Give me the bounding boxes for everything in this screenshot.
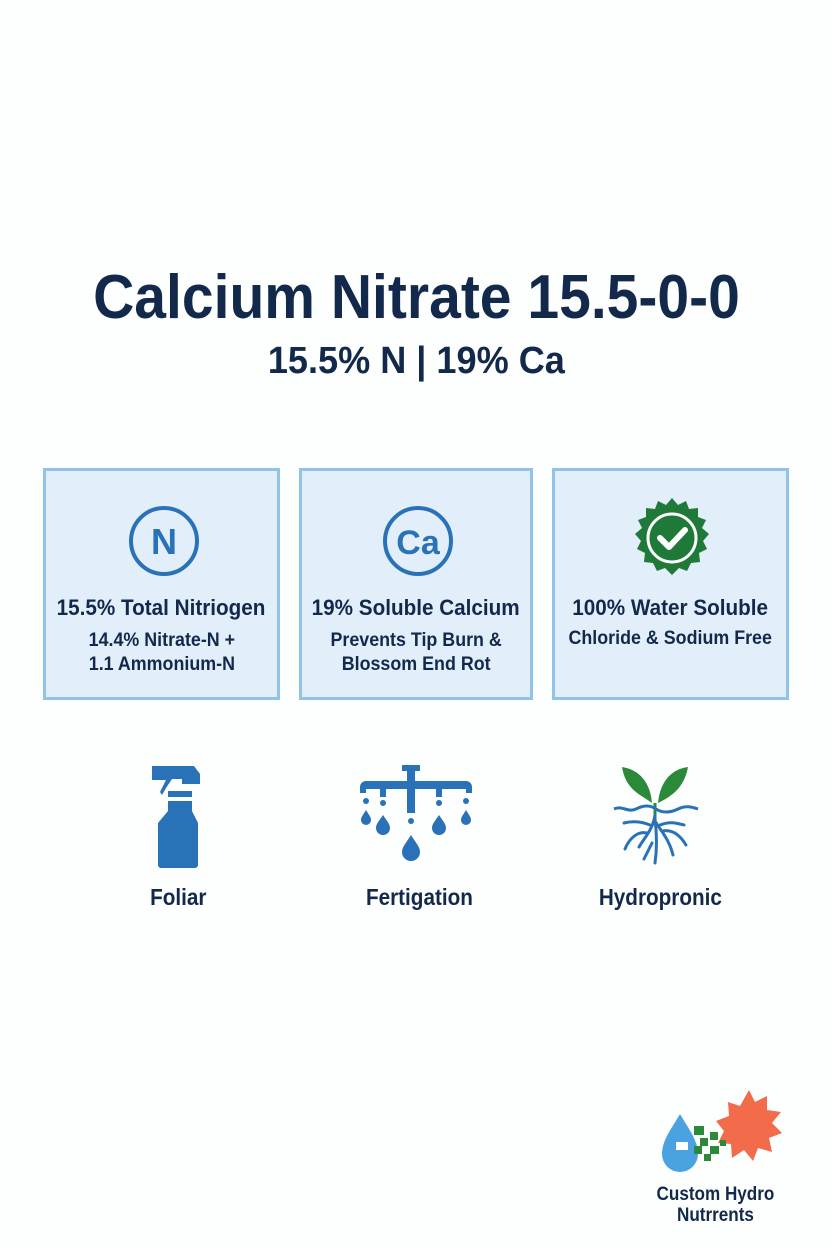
text: brand name: Nutrrents [677,1205,753,1226]
label: Hydroponic: Hydropronic [598,884,722,910]
icon: N circle: N [151,521,177,562]
title: Calcium Nitrate 15.5-0-0 [93,263,739,332]
icon: fertigation sprinkler [360,765,472,861]
icon: green check badge [635,498,709,575]
text: brand name: Custom Hydro [656,1184,774,1205]
text: Prevents Tip Burn & [330,630,502,651]
icon: N circle [129,506,199,576]
panel: nitrogen [43,468,280,700]
text [330,630,502,675]
label: Foliar: Foliar [150,884,206,910]
icon: Ca circle: Ca [396,524,441,562]
text [88,630,235,675]
text: Chloride & Sodium Free [569,628,772,649]
heading: 100% Water Soluble [573,595,768,620]
text: 1.1 Ammonium-N [88,654,235,675]
text: Blossom End Rot [342,654,490,675]
panel: water soluble [552,468,789,700]
heading: 15.5% Total Nitriogen [57,595,266,620]
text: 14.4% Nitrate-N + [88,630,235,651]
icon: spray bottle [152,766,200,868]
icon: hydroponic plant [613,767,698,864]
panel: calcium [299,468,533,700]
text: brand name [656,1184,774,1226]
logo [656,1090,782,1226]
icon: logo mark [662,1090,782,1172]
heading: 19% Soluble Calcium [312,595,520,620]
label: Fertigation: Fertigation [366,884,472,910]
subtitle: 15.5% N | 19% Ca [267,340,565,382]
icon: Ca circle [383,506,453,576]
